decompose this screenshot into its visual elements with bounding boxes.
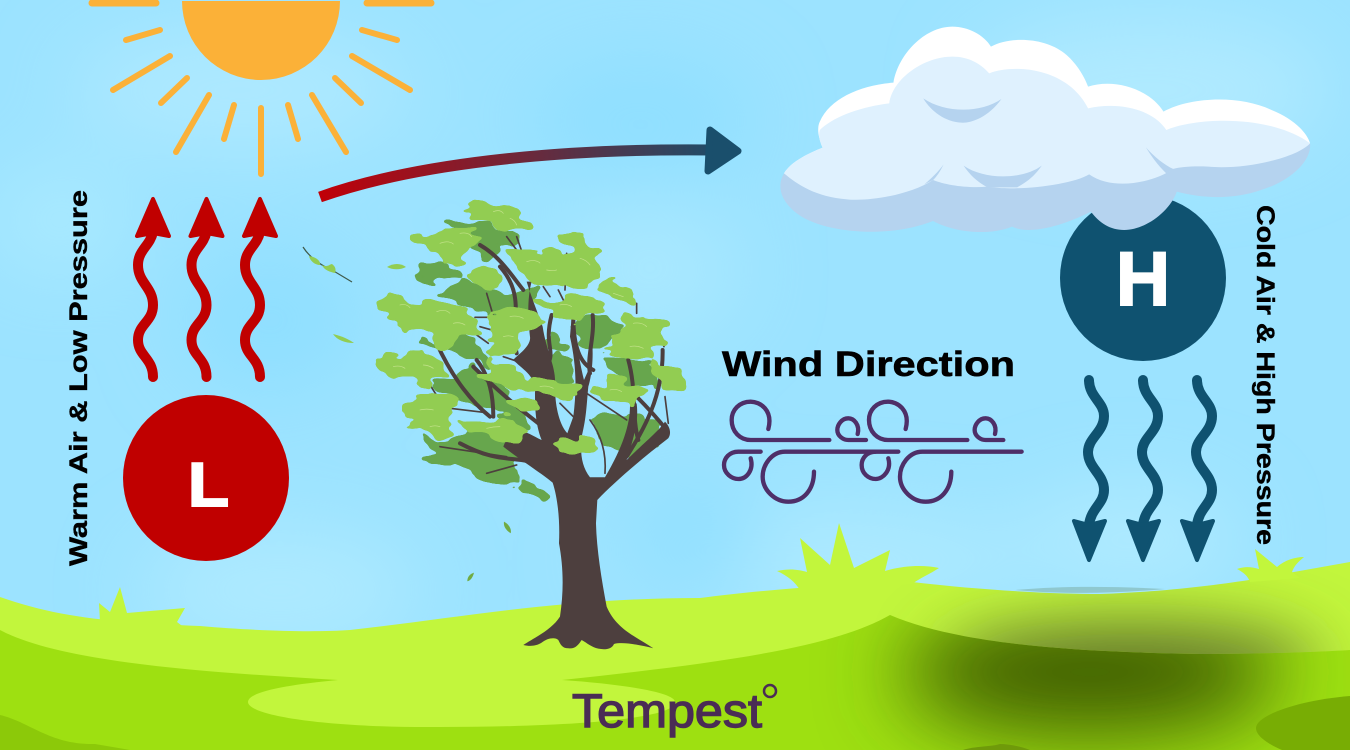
warm rising arrows: [137, 199, 276, 377]
grass tuft: centre: [777, 523, 939, 590]
blown leaf cluster: [309, 256, 336, 273]
sun rays: [92, 3, 431, 174]
loose leaf upper: [387, 264, 406, 269]
blown twig: [303, 247, 352, 282]
ground: olive shade on the upper band: [940, 626, 1320, 710]
sun: [92, 1, 431, 174]
tree: trunk and main limbs: [503, 282, 670, 649]
rising arrow 1: [137, 199, 169, 377]
cloud: [780, 27, 1310, 232]
rising arrow 2: [190, 199, 222, 377]
cloud shadow: [780, 143, 1310, 232]
cloud crease right: [1146, 147, 1173, 173]
logo: Tempest: Tempest: [572, 684, 762, 737]
tree: falling leaves: [467, 522, 511, 581]
ground: bottom right hill: [1256, 696, 1350, 750]
blown leaves and twig: [303, 247, 406, 343]
sinking arrow 1: [1074, 380, 1105, 560]
cloud body: [784, 57, 1310, 200]
ground: bottom left hill: [0, 715, 130, 750]
cloud white top: [784, 27, 1310, 182]
sun disc: [182, 1, 340, 80]
icon: wind swirls: [724, 402, 1022, 502]
rising arrow 3: [244, 199, 276, 377]
ground: light green hill: [0, 562, 1350, 750]
ground: [0, 562, 1350, 750]
cloud crease left: [924, 164, 944, 184]
sinking arrow 2: [1128, 380, 1159, 560]
sinking arrow 3: [1182, 380, 1213, 560]
ground: dark shade on the lower band: [900, 610, 1280, 734]
logo: degree mark: [764, 685, 776, 697]
letter L: L: [188, 451, 229, 520]
ground: horizon shadow: [1015, 587, 1165, 593]
ground: darker green band: [0, 615, 1350, 750]
label: cold air: Cold Air & High Pressure: [1251, 205, 1279, 545]
cloud crease top: [923, 98, 1001, 123]
tree: leaf speckle: [393, 211, 647, 428]
cloud crease middle: [964, 166, 1042, 187]
tree: [376, 203, 681, 649]
grass tuft: right: [1237, 549, 1304, 582]
label: warm air: Warm Air & Low Pressure: [65, 190, 93, 566]
tree: light foliage: [376, 203, 681, 454]
grass tuft: left: [98, 587, 190, 632]
cold sinking arrows: [1074, 380, 1213, 560]
letter H: H: [1116, 237, 1170, 322]
heading: wind direction: Wind Direction: [722, 345, 1015, 384]
tree: dark foliage: [413, 223, 660, 503]
loose leaf lower: [333, 334, 354, 343]
high pressure circle: [1060, 195, 1226, 361]
ground: small bump: [963, 744, 1030, 750]
tree: branches: [430, 237, 668, 473]
curved arrow: warm to cold: [320, 130, 738, 197]
low pressure circle: [123, 395, 289, 561]
